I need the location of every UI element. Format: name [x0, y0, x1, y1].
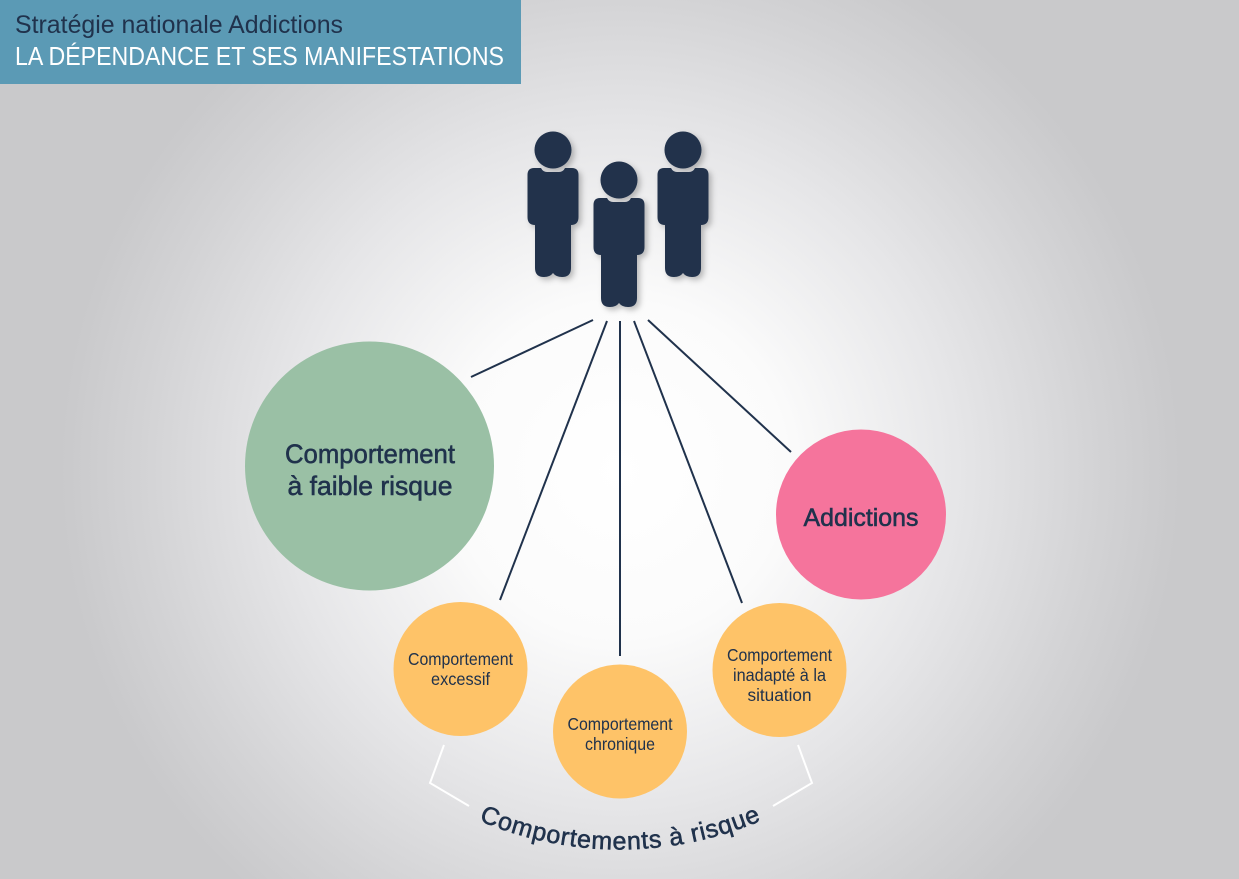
- connector lines: [471, 320, 791, 656]
- title: strategy name: Stratégie nationale Addictions: [15, 11, 343, 39]
- circle: behaviour unsuited to the situation: situation: [748, 685, 812, 705]
- circle: behaviour unsuited to the situation: [712, 603, 846, 737]
- circle: addictions: [776, 430, 946, 600]
- header banner: [0, 0, 521, 84]
- circle: addictions: Addictions: [804, 504, 918, 532]
- bracket: right: [773, 745, 812, 806]
- curved label: risky behaviours: Comportements à risque: [482, 807, 760, 850]
- circle: behaviour unsuited to the situation: inadapté à la: [733, 665, 826, 685]
- circle: excessive behaviour: Comportement: [408, 649, 513, 669]
- circle: low-risk behaviour: Comportement: [285, 439, 455, 469]
- circle: low-risk behaviour: [245, 342, 494, 590]
- circle: behaviour unsuited to the situation: Comportement: [727, 645, 832, 665]
- circle: chronic behaviour: Comportement: [568, 714, 673, 734]
- bracket: left: [430, 745, 469, 806]
- title: main heading: LA DÉPENDANCE ET SES MANIFESTATIONS: [15, 41, 504, 71]
- circle: chronic behaviour: [553, 664, 687, 798]
- circle: excessive behaviour: [394, 602, 528, 736]
- circle: chronic behaviour: chronique: [585, 734, 655, 754]
- icon: group of three people: [528, 132, 708, 307]
- circle: excessive behaviour: excessif: [431, 669, 490, 689]
- circle: low-risk behaviour: à faible risque: [288, 471, 452, 501]
